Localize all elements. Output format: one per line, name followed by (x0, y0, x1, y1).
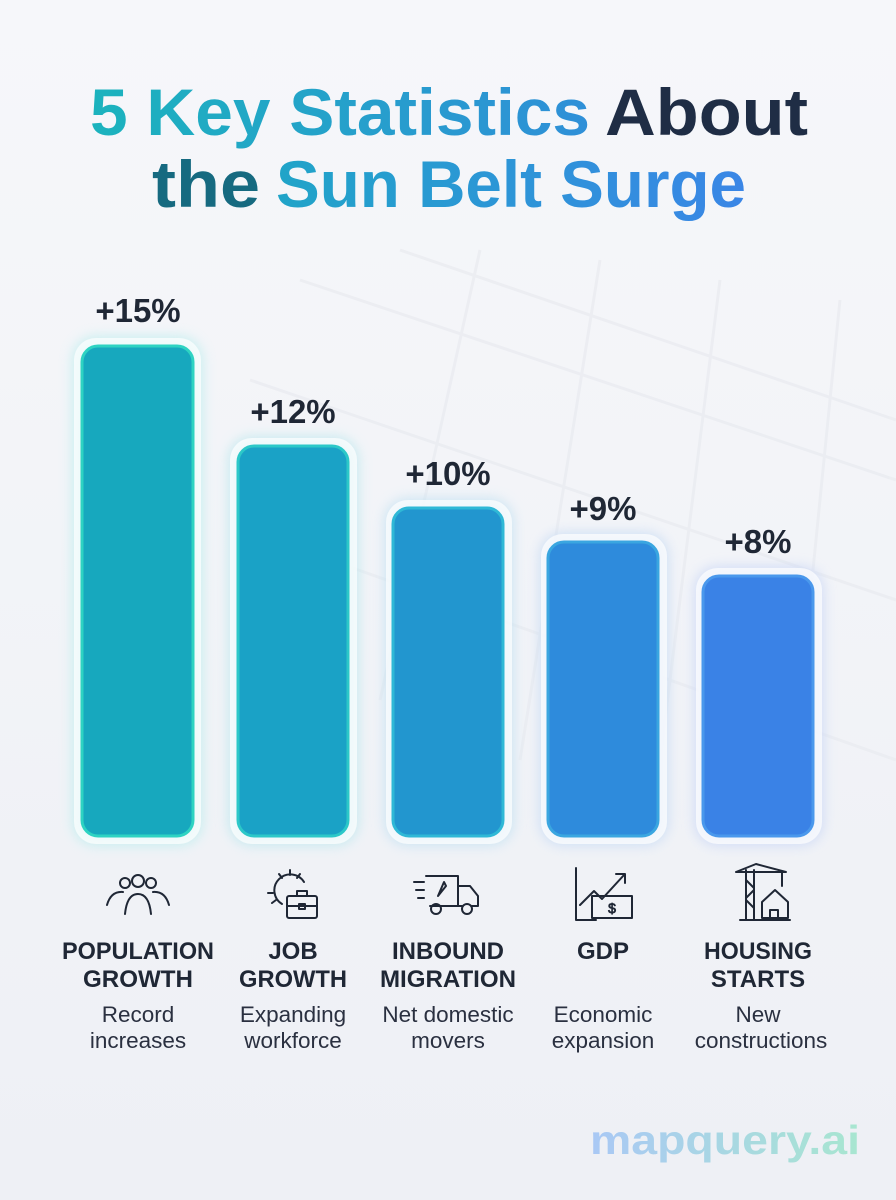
descriptions: Record (102, 1002, 174, 1027)
title: Sun Belt Surge (276, 147, 746, 221)
bar 2 (228, 393, 359, 846)
icon: truck (414, 876, 478, 914)
descriptions: constructions (695, 1028, 827, 1053)
icon: gdp: $ (608, 900, 616, 916)
title: the (152, 147, 260, 221)
icon: gdp (576, 868, 632, 920)
labels: HOUSING (704, 938, 812, 965)
icons (107, 864, 790, 920)
labels: POPULATION (62, 938, 214, 965)
descriptions: movers (411, 1028, 485, 1053)
descriptions: Expanding (240, 1002, 346, 1027)
labels: GDP (577, 938, 629, 965)
bar 2: +12% (250, 393, 336, 430)
icon: people (107, 875, 169, 914)
labels: STARTS (711, 966, 805, 993)
descriptions: Net domestic (382, 1002, 514, 1027)
labels (62, 938, 812, 993)
title: 5 Key Statistics (90, 75, 590, 149)
labels: INBOUND (392, 938, 504, 965)
descriptions: workforce (243, 1028, 342, 1053)
bar 3: +10% (405, 455, 491, 492)
footer logo: mapquery.ai (590, 1117, 860, 1163)
bar 1: +15% (95, 292, 181, 329)
bar 4: +9% (570, 490, 636, 527)
bar 3 (384, 455, 514, 846)
descriptions: increases (90, 1028, 186, 1053)
title (90, 75, 808, 221)
labels: GROWTH (239, 966, 347, 993)
descriptions (90, 1002, 827, 1053)
bar 5 (694, 523, 824, 846)
icon: gear briefcase (268, 870, 317, 918)
labels: MIGRATION (380, 966, 516, 993)
descriptions: Economic (554, 1002, 652, 1027)
bar chart (72, 292, 824, 846)
bar 4 (539, 490, 669, 846)
title: About (605, 75, 808, 149)
labels: JOB (268, 938, 318, 965)
bar 5: +8% (725, 523, 791, 560)
descriptions: New (735, 1002, 781, 1027)
descriptions: expansion (552, 1028, 654, 1053)
bar 1 (72, 292, 203, 846)
icon: crane house (736, 864, 790, 920)
labels: GROWTH (83, 966, 193, 993)
